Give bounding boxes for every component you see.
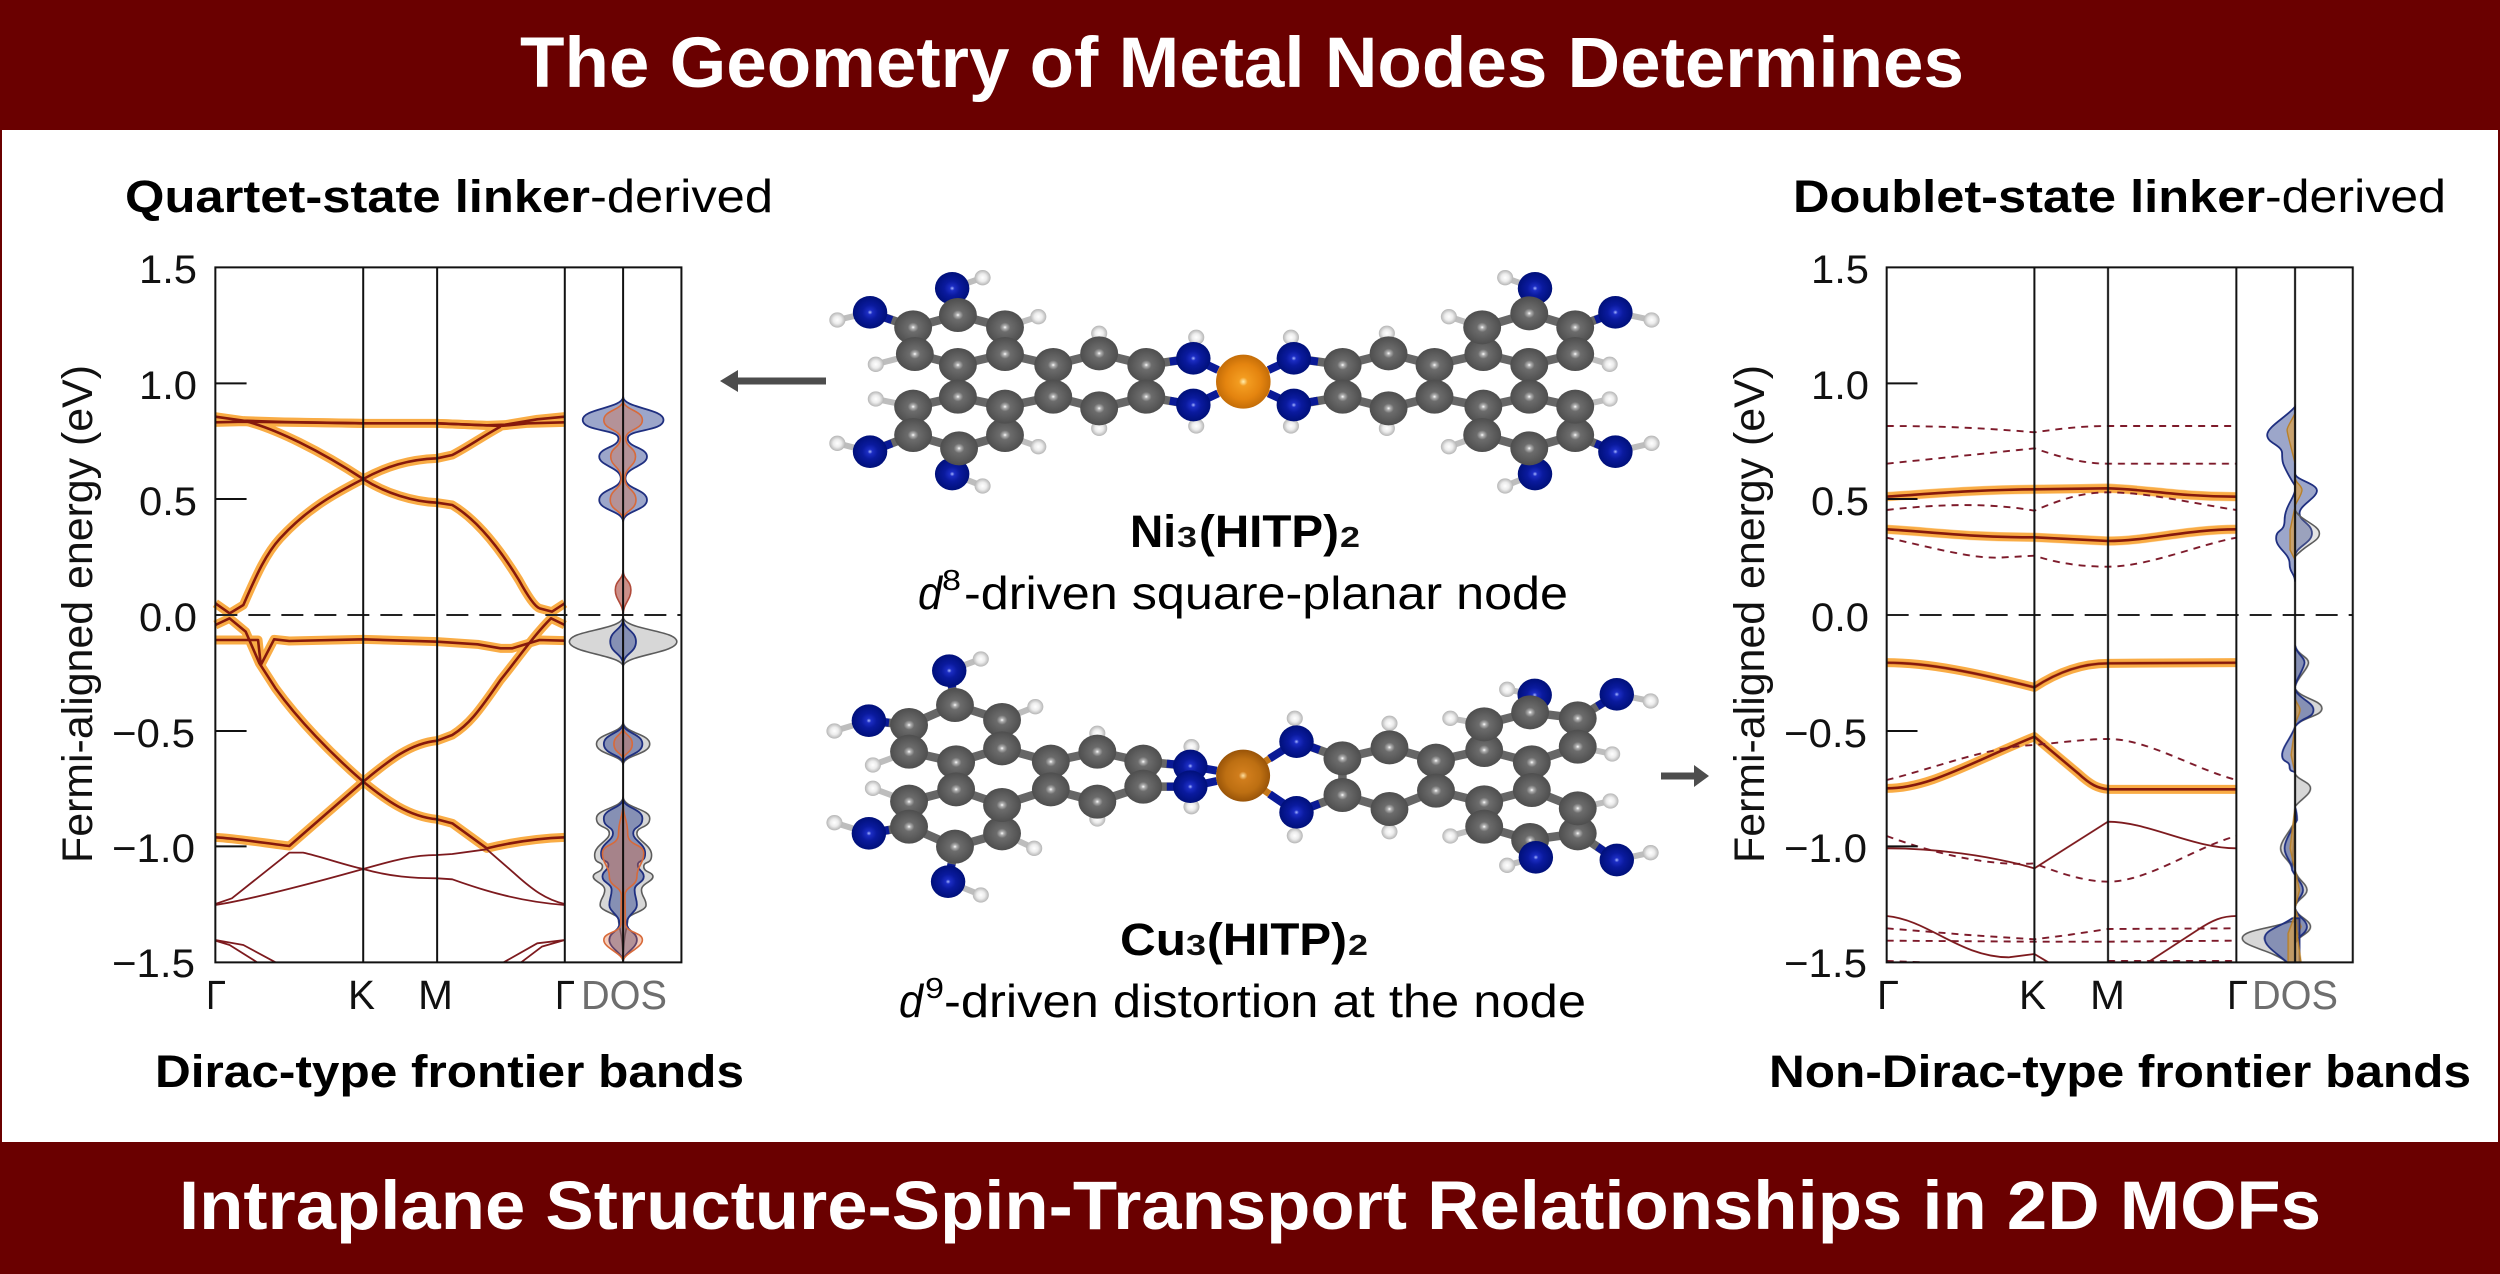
label: Ni3(HITP)2: 2 [1340,522,1360,554]
right y axis tick labels: −1.0 [1784,827,1867,871]
left bands: dark core lines [215,417,565,848]
left x axis labels: Γ [555,972,575,1018]
bonds [837,278,1652,486]
right x axis labels: Γ [2227,972,2248,1018]
left axes frame and symmetry lines [215,267,681,962]
right y axis tick labels: −0.5 [1784,712,1867,756]
molecule: Cu3(HITP)2 structure [826,651,1659,903]
label: Cu3(HITP)2: 3 [1186,930,1206,962]
right y axis tick labels: −1.5 [1784,942,1867,986]
left y axis tick labels: 1.0 [139,364,197,408]
carbon atoms [890,688,1597,864]
caption: d8-driven square-planar node: d [918,567,943,619]
left x axis labels: Γ [206,972,226,1018]
right y axis tick labels: 0.5 [1811,480,1869,524]
footer banner: Intraplane Structure-Spin-Transport Relationships in 2D MOFs [179,1167,2321,1244]
right dashed fermi line [1887,614,2353,616]
left DOS violin curves [569,397,677,962]
bonds [834,659,1651,895]
title banner: The Geometry of Metal Nodes Determines [520,24,1964,103]
label: Ni3(HITP)2: (HITP) [1199,506,1339,557]
title banner [0,0,2500,130]
nitrogen atoms behind carbon [852,654,1634,898]
right y axis tick labels: 1.5 [1811,248,1869,292]
caption: dirac-type frontier bands: Dirac-type frontier bands [155,1046,744,1097]
label: Ni3(HITP)2 [1130,506,1360,557]
right bands: highlighted frontier glow [1887,488,2236,789]
right band structure and DOS chart [1887,267,2353,962]
right x axis labels: K [2019,972,2046,1018]
nitrogen atoms [853,272,1633,490]
right bands: thin solid lines [1887,822,2236,962]
arrow: to left chart [720,370,826,392]
label: Ni3(HITP)2: 3 [1177,522,1197,554]
left x axis labels: M [418,972,453,1018]
hydrogen atoms [829,270,1660,494]
hydrogen atoms [826,651,1659,903]
right x axis labels [1877,972,2338,1018]
left x axis labels: DOS [581,972,667,1018]
left x axis labels [206,972,667,1018]
heading: quartet-state linker-derived: -derived [590,170,773,222]
right DOS curves [2242,407,2322,962]
arrow: to right chart [1661,765,1709,787]
right y axis title: Fermi-aligned energy (eV) [1726,365,1774,863]
left y axis tick labels: 0.0 [139,596,197,640]
label: Cu3(HITP)2: Cu [1120,914,1186,965]
heading: doublet-state linker-derived: Doublet-state linker [1793,171,2265,222]
right x axis labels: Γ [1877,972,1899,1018]
left x axis labels: K [348,972,375,1018]
right x axis labels: DOS [2252,972,2338,1018]
left y axis tick labels: −0.5 [112,712,195,756]
footer banner [0,1142,2500,1274]
caption: d9-driven distortion at the node: -driven distortion at the node [944,975,1586,1027]
left y axis tick labels: −1.0 [112,827,195,871]
left y axis tick labels [112,248,197,986]
nickel atom [1216,355,1271,409]
left dashed fermi line [215,614,681,616]
heading: doublet-state linker-derived: -derived [2265,170,2446,222]
left y axis tick labels: 0.5 [139,480,197,524]
heading: doublet-state linker-derived [1793,170,2446,222]
caption: d8-driven square-planar node: 8 [942,565,961,597]
molecule: Ni3(HITP)2 structure [829,270,1660,494]
caption: d9-driven distortion at the node: 9 [925,973,944,1005]
caption: non-dirac-type frontier bands: Non-Dirac-type frontier bands [1769,1046,2471,1097]
right bands: dashed minority-spin lines [1887,426,2236,962]
carbon atoms [894,296,1594,465]
right y axis tick labels: 0.0 [1811,596,1869,640]
label: Cu3(HITP)2: (HITP) [1207,914,1347,965]
nitrogen atoms in front [1173,750,1553,874]
label: Cu3(HITP)2: 2 [1348,930,1368,962]
copper atom [1216,750,1270,802]
left band structure and DOS chart [215,267,681,962]
heading: quartet-state linker-derived [125,170,773,222]
right x axis labels: M [2090,972,2125,1018]
left y axis title: Fermi-aligned energy (eV) [54,365,102,863]
right y axis tick labels [1784,248,1869,986]
caption: d9-driven distortion at the node: d [899,975,924,1027]
heading: quartet-state linker-derived: Quartet-state linker [125,171,590,222]
left y axis tick labels: 1.5 [139,248,197,292]
left bands: thin lower bands [215,849,565,962]
left y axis tick labels: −1.5 [112,942,195,986]
right axes frame and symmetry lines [1887,267,2353,962]
label: Cu3(HITP)2 [1120,914,1368,965]
left bands: highlighted frontier glow [215,417,565,848]
right y axis tick labels: 1.0 [1811,364,1869,408]
label: Ni3(HITP)2: Ni [1130,506,1176,557]
caption: d8-driven square-planar node: -driven square-planar node [964,567,1568,619]
right bands: dark core lines [1887,488,2236,789]
